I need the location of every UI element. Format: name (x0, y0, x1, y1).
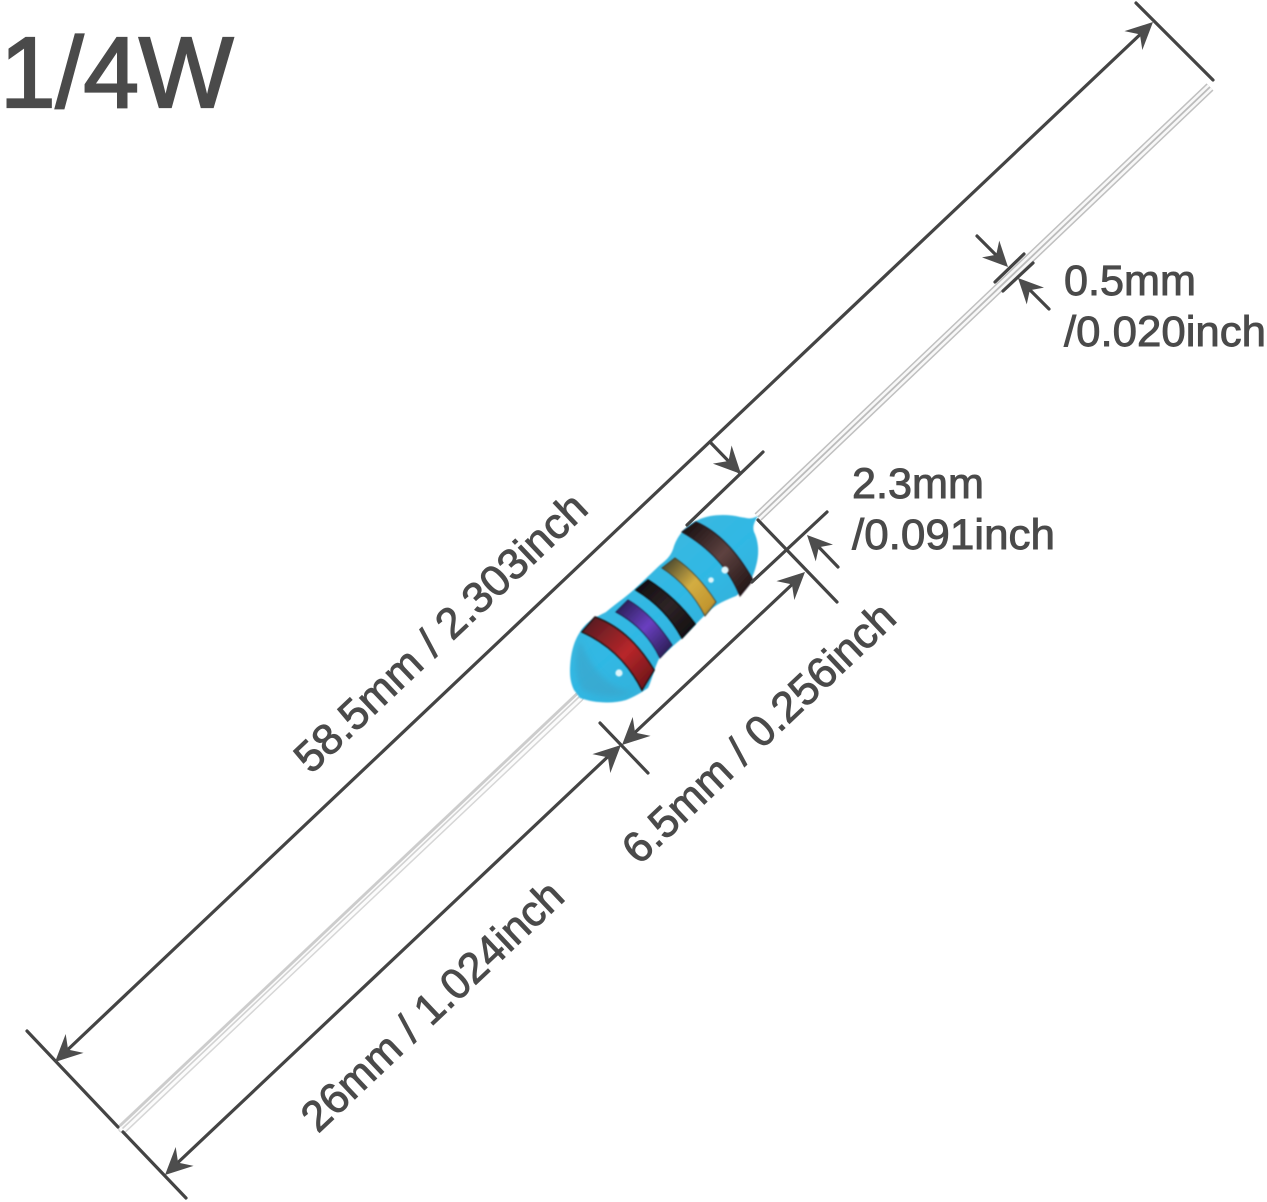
band: red (582, 617, 654, 690)
title: 1/4W: 1/4W (0, 17, 234, 129)
label: 2.3mm body diameter: /0.091inch (852, 511, 1055, 559)
upper wire lead (758, 87, 1210, 517)
band: purple (616, 600, 672, 658)
body shell (570, 515, 758, 702)
dimension: body diameter 2.3mm (752, 512, 838, 582)
body highlights (615, 566, 729, 677)
label: 58.5mm overall length: 58.5mm / 2.303inch (285, 484, 597, 782)
dimension: wire diameter 0.5mm (977, 236, 1049, 309)
dimension: lead length 26mm (123, 723, 648, 1198)
band: brown-black (682, 522, 753, 596)
body shading (576, 640, 632, 696)
label: 0.5mm wire diameter: 0.5mm (1064, 257, 1196, 305)
band: black (636, 580, 695, 638)
label: 2.3mm body diameter: 2.3mm (852, 460, 984, 508)
label: 6.5mm body length: 6.5mm / 0.256inch (613, 593, 905, 873)
label: 0.5mm wire diameter: /0.020inch (1064, 308, 1266, 356)
band: gold (662, 558, 716, 616)
lower wire lead (120, 694, 579, 1128)
label: 26mm lead length: 26mm / 1.024inch (292, 871, 573, 1141)
resistor body (570, 515, 758, 702)
dimension: body length 6.5mm (613, 520, 837, 754)
